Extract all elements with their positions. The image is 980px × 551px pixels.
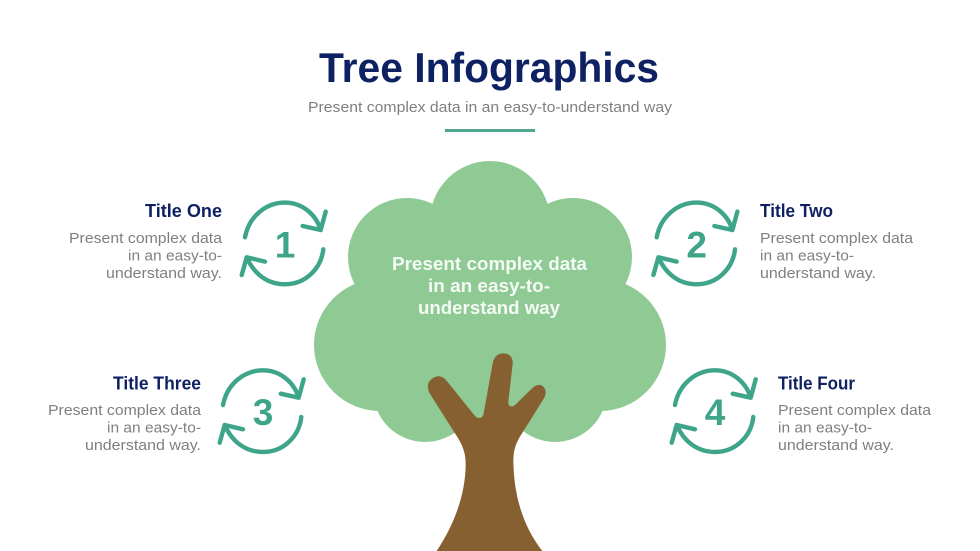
body text two: Present complex data <box>760 231 914 247</box>
body text four: in an easy-to- <box>778 420 872 436</box>
body text one: understand way. <box>106 266 222 282</box>
body text three: Present complex data <box>48 403 202 419</box>
icon: cycle arrows 3 <box>220 370 304 452</box>
icon: cycle arrows 4 <box>672 370 756 452</box>
icon: cycle arrows 2: 2 <box>686 224 707 265</box>
item four <box>672 370 932 454</box>
body text two <box>760 231 914 282</box>
heading: title one: Title One <box>145 201 222 221</box>
icon: cycle arrows 1 <box>242 203 326 284</box>
canopy text: Present complex data <box>392 254 588 274</box>
icon: cycle arrows 3: 3 <box>253 392 273 433</box>
body text one: in an easy-to- <box>128 248 222 264</box>
tree canopy <box>314 161 666 442</box>
body text four: understand way. <box>778 438 894 454</box>
body text four <box>778 403 932 454</box>
heading: title two: Title Two <box>760 201 833 221</box>
body text two: in an easy-to- <box>760 248 854 264</box>
body text three: understand way. <box>85 438 201 454</box>
body text one <box>69 231 223 282</box>
item one <box>69 201 326 284</box>
title: Tree Infographics <box>319 44 659 91</box>
tree trunk <box>428 353 546 551</box>
heading: title three: Title Three <box>113 374 201 394</box>
body text three <box>48 403 202 454</box>
icon: cycle arrows 2 <box>653 203 737 284</box>
item two <box>653 201 914 284</box>
canopy text: understand way <box>418 298 560 318</box>
heading: title four: Title Four <box>778 374 855 394</box>
title underline <box>445 129 535 132</box>
body text two: understand way. <box>760 266 876 282</box>
body text one: Present complex data <box>69 231 223 247</box>
tree <box>314 161 666 551</box>
subtitle: Present complex data in an easy-to-understand way <box>308 99 673 116</box>
body text three: in an easy-to- <box>107 420 201 436</box>
canopy text <box>392 254 588 318</box>
icon: cycle arrows 4: 4 <box>705 392 726 433</box>
canopy text: in an easy-to- <box>428 276 550 296</box>
icon: cycle arrows 1: 1 <box>275 224 295 265</box>
body text four: Present complex data <box>778 403 932 419</box>
item three <box>48 370 304 454</box>
